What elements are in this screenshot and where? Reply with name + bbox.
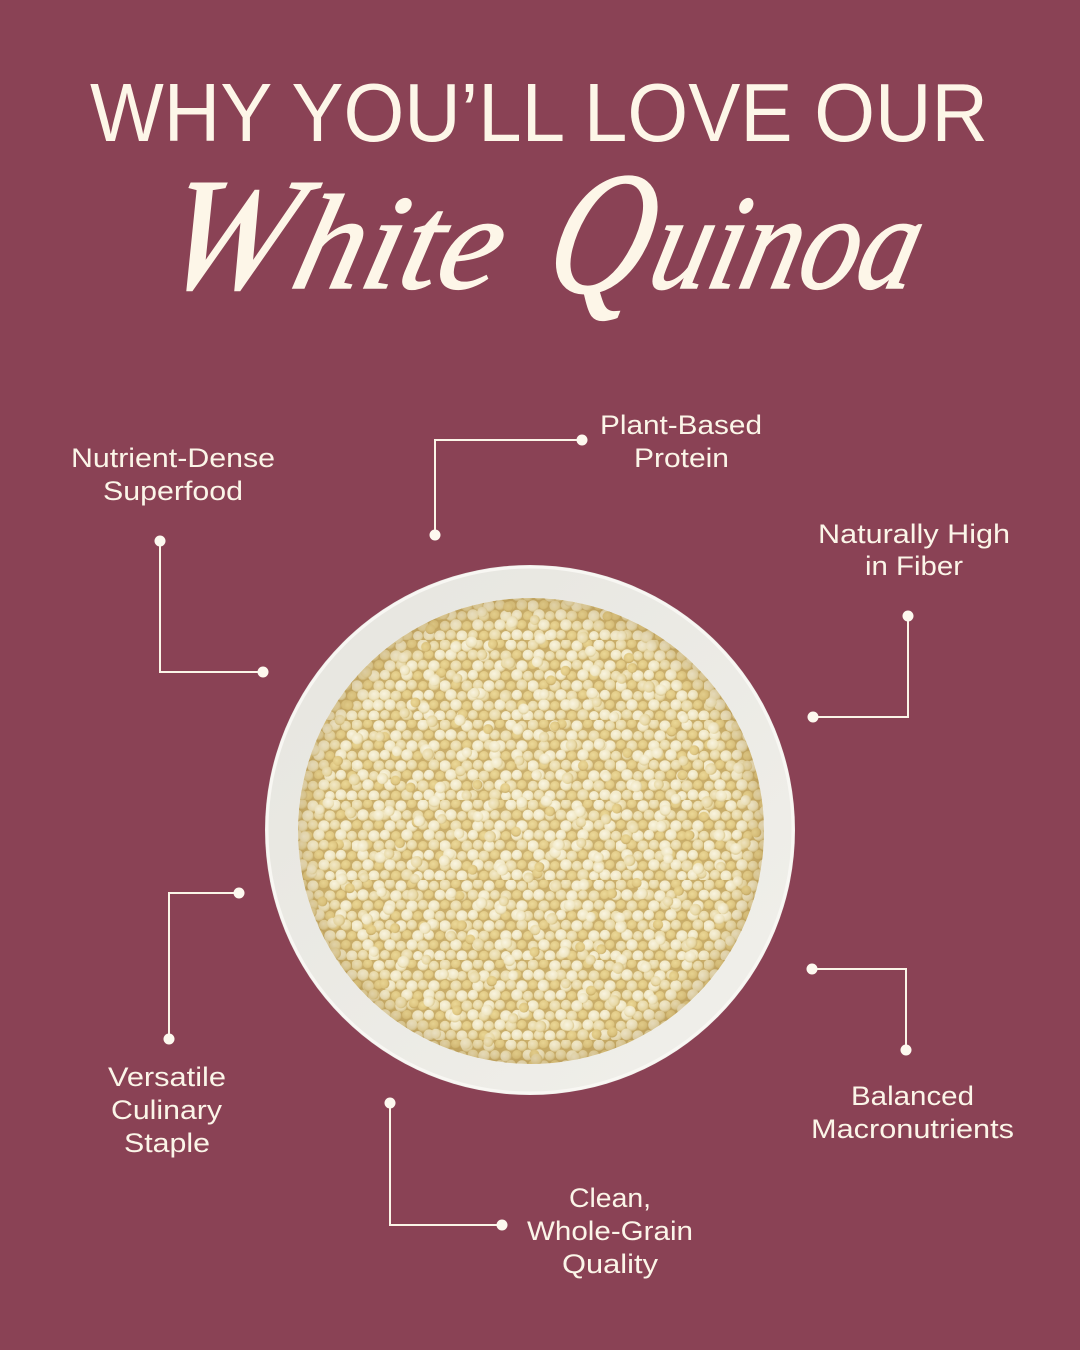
callout: balanced macronutrients: Balanced bbox=[851, 1081, 974, 1111]
callout: naturally high in fiber: Naturally High bbox=[818, 519, 1010, 549]
title: white quinoa script bbox=[145, 137, 940, 330]
image: bowl of white quinoa bbox=[265, 565, 795, 1095]
callout: clean, whole-grain quality: Whole-Grain bbox=[527, 1216, 693, 1246]
callout: clean, whole-grain quality: Clean, bbox=[569, 1183, 651, 1213]
callout: nutrient-dense superfood: Superfood bbox=[103, 476, 243, 506]
callout: versatile culinary staple: Culinary bbox=[111, 1095, 223, 1125]
title: why you'll love our: WHY YOU’LL LOVE OUR bbox=[90, 66, 988, 159]
callout: naturally high in fiber: in Fiber bbox=[865, 551, 963, 581]
callout: versatile culinary staple: Staple bbox=[124, 1128, 210, 1158]
callout: versatile culinary staple: Versatile bbox=[108, 1062, 226, 1092]
callout: plant-based protein: Protein bbox=[634, 443, 729, 473]
title: white quinoa script: hite bbox=[281, 168, 523, 318]
title: white quinoa script: uinoa bbox=[638, 168, 940, 318]
quinoa grains bbox=[290, 590, 772, 1072]
callout: versatile culinary staple bbox=[108, 888, 244, 1158]
title: white quinoa script: W bbox=[145, 146, 332, 323]
callout: nutrient-dense superfood: Nutrient-Dense bbox=[71, 443, 275, 473]
callout: balanced macronutrients bbox=[806, 964, 1014, 1144]
callout: balanced macronutrients: Macronutrients bbox=[811, 1114, 1014, 1144]
callout: plant-based protein: Plant-Based bbox=[600, 410, 762, 440]
title: white quinoa script: Q bbox=[530, 137, 679, 330]
callout: clean, whole-grain quality: Quality bbox=[562, 1249, 659, 1279]
callout: naturally high in fiber bbox=[808, 519, 1010, 722]
callout: clean, whole-grain quality bbox=[384, 1098, 693, 1279]
callout: plant-based protein bbox=[430, 410, 762, 540]
bowl bbox=[265, 565, 795, 1095]
callout: nutrient-dense superfood bbox=[71, 443, 275, 678]
